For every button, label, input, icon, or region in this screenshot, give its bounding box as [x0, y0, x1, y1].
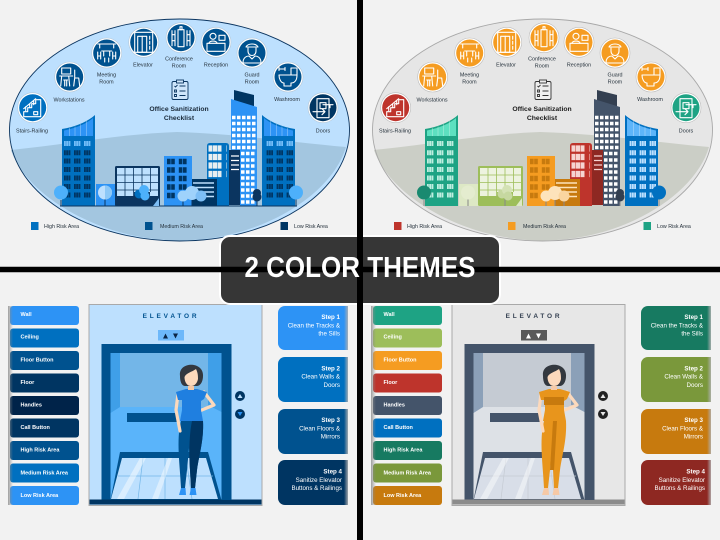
icon: meeting room [455, 38, 485, 68]
step 4 [641, 460, 711, 505]
legend: risk areas: High Risk Area [407, 224, 442, 230]
icon: reception [564, 27, 594, 57]
step 2: Step 2 [684, 366, 704, 372]
step 2: Step 2 [321, 366, 341, 372]
step 4: Buttons & Railings [291, 485, 342, 492]
icon labels [379, 56, 693, 134]
legend: risk areas: Low Risk Area [657, 224, 691, 230]
step 4: Buttons & Railings [654, 485, 705, 492]
icon: washroom [636, 62, 666, 92]
step 3 [278, 409, 348, 454]
step 4: Step 4 [323, 468, 343, 476]
panel: blue label list: Handles [20, 402, 42, 408]
oval base [10, 19, 350, 241]
panel: blue label list: Call Button [20, 425, 50, 431]
floor indicator [158, 330, 184, 340]
title: office sanitization checklist: Checklist [527, 115, 558, 122]
icon: doors [308, 93, 338, 123]
panel: blue elevator [88, 304, 262, 506]
step 1 [641, 306, 711, 350]
step 1: the Sills [318, 330, 340, 338]
legend: risk areas: Low Risk Area [294, 224, 328, 230]
elevator title: ELEVATOR [143, 313, 199, 320]
panel: multicolor label list: Medium Risk Area [384, 471, 432, 477]
step 1: the Sills [681, 330, 703, 338]
icon labels: Reception [204, 62, 228, 68]
icon labels: Room [172, 64, 187, 70]
icon labels: Guard [608, 72, 622, 78]
icon labels: Room [462, 79, 477, 85]
legend: risk areas [394, 222, 691, 230]
legend: risk areas: Medium Risk Area [160, 224, 203, 230]
icon labels: Elevator [133, 62, 153, 68]
icon: stairs railing [381, 93, 411, 123]
step 2: Doors [323, 382, 340, 389]
icon labels: Conference [528, 56, 556, 62]
step 3: Step 3 [684, 417, 704, 424]
icon labels: Room [99, 79, 114, 85]
panel: blue label list: Ceiling [20, 335, 39, 341]
icon labels: Reception [567, 62, 591, 68]
panel: multicolor label list: Wall [384, 312, 395, 318]
icon labels: Doors [316, 128, 330, 134]
panel: blue label list: Medium Risk Area [20, 471, 69, 477]
step 4: Sanitize Elevator [296, 477, 342, 484]
panel: multicolor label list: Floor [384, 380, 398, 386]
icon: elevator [492, 27, 522, 57]
icon: conference room [529, 23, 559, 53]
title: office sanitization checklist: Office Sanitization [512, 106, 572, 113]
icon labels: Elevator [496, 62, 516, 68]
step 2 [641, 357, 711, 402]
icon: meeting room [92, 38, 122, 68]
icon: conference room [166, 23, 196, 53]
step 3: Clean Floors & [299, 425, 341, 432]
banner: 2 color themes: 2 COLOR THEMES [244, 252, 476, 284]
icon labels: Washroom [637, 97, 663, 103]
step 1: Clean the Tracks & [651, 322, 704, 329]
panel: multicolor label list [371, 306, 442, 505]
step 3 [641, 409, 711, 454]
step 1: Step 1 [321, 314, 341, 321]
oval base [372, 19, 712, 241]
panel: grey elevator [452, 304, 626, 506]
icon: workstations [55, 62, 85, 92]
floor indicator [521, 330, 547, 340]
icon labels: Guard [245, 72, 259, 78]
panel: blue label list: Floor Button [20, 357, 54, 363]
icon: stairs railing [18, 93, 48, 123]
panel: multicolor label list: Ceiling [384, 335, 402, 341]
step 4 [278, 460, 348, 505]
step 1: Step 1 [684, 314, 704, 321]
call buttons [598, 391, 608, 419]
call buttons [235, 391, 245, 419]
step 3: Mirrors [684, 434, 703, 440]
icon: guard room [237, 38, 267, 68]
panel: blue label list: Wall [20, 312, 32, 318]
woman figure [176, 365, 214, 495]
icon: doors [671, 93, 701, 123]
panel: blue label list: Floor [20, 380, 35, 386]
panel: multicolor label list: Floor Button [384, 357, 417, 363]
panel: multicolor oval checklist [372, 19, 712, 241]
icon labels [16, 56, 330, 134]
panel: blue label list [8, 306, 79, 505]
icon: washroom [273, 62, 303, 92]
icon: elevator [129, 27, 159, 57]
icon labels: Room [535, 64, 550, 70]
icon: reception [201, 27, 231, 57]
icon labels: Stairs-Railing [16, 128, 48, 134]
step 4: Step 4 [686, 468, 706, 476]
illustration: city buildings [54, 90, 303, 206]
icon labels: Washroom [274, 97, 300, 103]
icon: guard room [600, 38, 630, 68]
elevator title: ELEVATOR [506, 313, 562, 320]
icon labels: Room [245, 79, 260, 85]
step 2: Clean Walls & [301, 374, 341, 381]
panel: multicolor label list: Call Button [384, 425, 413, 431]
title: office sanitization checklist: Office Sanitization [149, 106, 209, 113]
panel: blue label list: High Risk Area [20, 448, 60, 454]
legend: risk areas: High Risk Area [44, 224, 79, 230]
panel: blue label list: Low Risk Area [20, 493, 59, 499]
panel: multicolor steps [641, 306, 711, 505]
step 2: Doors [686, 382, 703, 389]
icon labels: Meeting [97, 72, 116, 78]
panel: multicolor label list: Handles [384, 402, 405, 408]
icon labels: Doors [679, 128, 693, 134]
step 1: Clean the Tracks & [288, 322, 341, 329]
icon labels: Workstations [416, 98, 448, 104]
panel: multicolor label list: Low Risk Area [384, 493, 422, 499]
icon: workstations [418, 62, 448, 92]
icon labels: Room [608, 79, 623, 85]
step 2: Clean Walls & [664, 374, 704, 381]
panel: blue oval checklist [10, 19, 350, 241]
title: office sanitization checklist: Checklist [164, 115, 195, 122]
icon labels: Stairs-Railing [379, 128, 411, 134]
step 2 [278, 357, 348, 402]
icon labels: Conference [165, 56, 193, 62]
panel: blue steps [278, 306, 348, 505]
illustration: city buildings [417, 90, 666, 206]
step 3: Clean Floors & [662, 425, 704, 432]
icon labels: Workstations [53, 98, 85, 104]
woman figure [539, 365, 577, 495]
icon: clipboard checklist [535, 80, 551, 100]
step 4: Sanitize Elevator [659, 477, 705, 484]
panel: multicolor label list: High Risk Area [384, 448, 423, 454]
legend: risk areas [31, 222, 328, 230]
icon: clipboard checklist [172, 80, 188, 100]
legend: risk areas: Medium Risk Area [523, 224, 566, 230]
step 1 [278, 306, 348, 350]
icon labels: Meeting [460, 72, 479, 78]
step 3: Step 3 [321, 417, 341, 424]
step 3: Mirrors [321, 434, 340, 440]
